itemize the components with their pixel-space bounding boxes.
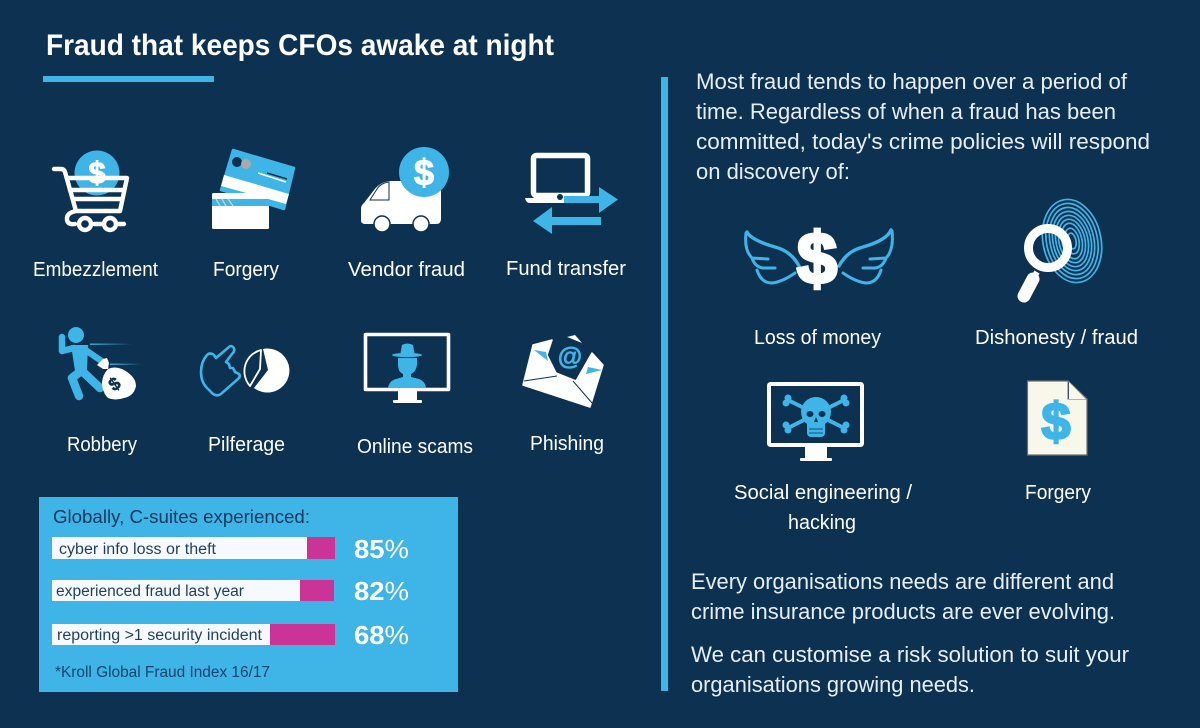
bar: cyber info loss or theft 85% <box>52 534 409 564</box>
label: Vendor fraud: Vendor fraud <box>348 259 465 281</box>
icon: phishing envelope <box>523 335 603 407</box>
label: Dishonesty / fraud: Dishonesty / fraud <box>975 327 1138 349</box>
icon: forgery credit cards <box>212 150 294 229</box>
label: Online scams: Online scams <box>357 436 473 458</box>
panel: fraud types <box>33 147 626 458</box>
icon: winged dollar: $ <box>797 219 837 299</box>
source footnote: *Kroll Global Fraud Index 16/17 <box>55 664 270 681</box>
intro paragraph <box>696 69 1150 184</box>
label: Embezzlement: Embezzlement <box>33 259 158 281</box>
intro paragraph: time. Regardless of when a fraud has been <box>696 99 1116 124</box>
closing text: organisations <box>691 569 1115 624</box>
label: Loss of money: Loss of money <box>754 327 881 349</box>
bar: experienced fraud last year 82%: experienced fraud last year <box>56 583 244 600</box>
label: Forgery: Forgery <box>213 259 279 281</box>
closing text: risk solution: We can customise a risk solution to suit your <box>691 642 1129 667</box>
icon: skull monitor <box>769 384 862 461</box>
closing text: organisations: Every organisations needs are different and <box>691 569 1114 594</box>
bar: reporting more than 1 security incident 68%: 68% <box>354 620 409 650</box>
label: Forgery: Forgery <box>1025 482 1091 504</box>
bar: cyber info loss or theft 85%: cyber info loss or theft <box>59 541 217 558</box>
closing text: risk solution: organisations growing needs. <box>691 672 975 697</box>
icon: embezzlement shopping cart <box>54 150 127 230</box>
icon: embezzlement shopping cart: $ <box>88 155 106 190</box>
intro paragraph: committed, today's crime policies will respond <box>696 129 1150 154</box>
bar: reporting more than 1 security incident 68%: reporting >1 security incident <box>57 627 263 644</box>
intro paragraph: on discovery of: <box>696 159 850 184</box>
icon: online scams monitor <box>366 334 448 403</box>
label: Social engineering / hacking: hacking <box>788 512 856 534</box>
label: Fund transfer: Fund transfer <box>506 258 626 280</box>
icon: phishing envelope: @ <box>558 343 582 371</box>
vertical divider <box>661 77 668 691</box>
icon: robbery runner with money bag <box>62 327 142 400</box>
label: Robbery: Robbery <box>67 434 137 456</box>
title: Fraud that keeps CFOs awake at night <box>46 29 554 62</box>
label: Phishing: Phishing <box>530 433 604 455</box>
bar: cyber info loss or theft 85%: 85% <box>354 534 409 564</box>
icon: vendor fraud van <box>361 147 449 232</box>
label: Social engineering / hacking: Social engineering / <box>734 482 912 504</box>
panel: global statistics <box>39 497 458 692</box>
stats heading: Globally, C-suites experienced: <box>53 507 310 527</box>
icon: forged document: $ <box>1042 393 1071 451</box>
icon: pilferage hand and pie chart <box>201 346 289 395</box>
label: Social engineering / hacking <box>734 482 912 534</box>
closing text: risk solution <box>691 642 1129 697</box>
icon: magnifier over fingerprint <box>1024 194 1109 296</box>
intro paragraph: Most fraud tends to happen over a period of <box>696 69 1128 94</box>
title <box>43 29 554 82</box>
closing text: organisations: crime insurance products are ever evolving. <box>691 599 1115 624</box>
label: Pilferage: Pilferage <box>208 434 285 456</box>
bar: experienced fraud last year 82% <box>52 576 409 606</box>
bar: reporting more than 1 security incident 68% <box>52 620 409 650</box>
bar: experienced fraud last year 82%: 82% <box>354 576 409 606</box>
icon: winged dollar <box>746 219 892 299</box>
panel: discovery categories <box>734 194 1138 534</box>
icon: vendor fraud van: $ <box>414 152 434 193</box>
icon: robbery runner with money bag: $ <box>105 373 124 395</box>
icon: forged document <box>1028 381 1087 455</box>
icon: fund transfer laptop and arrows <box>525 156 618 234</box>
